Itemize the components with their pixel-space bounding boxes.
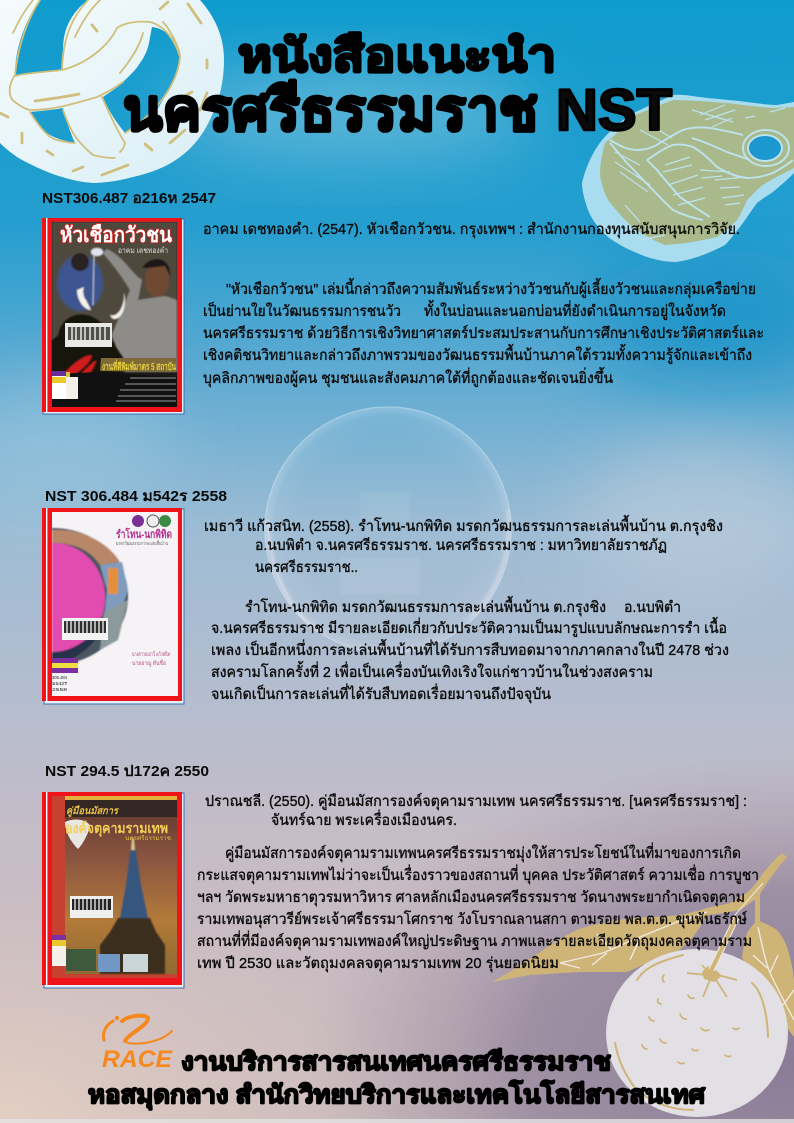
book cover 3: นครศรีธรรมราช [125,834,171,842]
icon: soap bubble [264,406,512,654]
abstract 3: คู่มือนมัสการองค์จตุคามรามเทพนครศรีธรรมราชมุ่งให้สารประโยชน์ในที่มาของการเกิด [225,842,741,863]
citation 3: ปราณชลี. (2550). คู่มือนมัสการองค์จตุคามรามเทพ นครศรีธรรมราช. [นครศรีธรรมราช] : [205,793,747,811]
icon: leaves and citrus fruit [492,853,794,1117]
icon: meat slice [582,95,794,262]
footer [88,1016,706,1111]
citation 2 [204,515,723,576]
icon: pretzel [0,0,224,183]
abstract 3 [197,842,759,973]
book cover 1: อาคม เดชทองคำ [118,246,168,255]
book cover 3 [42,792,184,988]
abstract 3: เทพ ปี 2530 และวัตถุมงคลจตุคามรามเทพ 20 รุ่นยอดนิยม [197,955,559,973]
abstract 2: เพลง เป็นอีกหนึ่งการละเล่นพื้นบ้านที่ได้รับการสืบทอดมาจากภาคกลางในปี 2478 ช่วง [211,639,729,659]
book cover 3: องค์จตุคามรามเทพ [65,820,168,837]
call number 3: NST 294.5 ป172ค 2550 [45,763,209,780]
abstract 1 [203,278,764,388]
abstract 2: อ.นบพิตำ [624,599,681,616]
book cover 1: งานที่ตีพิมพ์มาตร 5 สถาบัน [102,359,176,373]
title line 2: NST [556,78,672,143]
citation 3 [205,793,747,829]
icon: fruit stem [687,883,763,997]
citation 1: อาคม เดชทองคำ. (2547). หัวเชือกวัวชน. กรุงเทพฯ : สำนักงานกองทุนสนับสนุนการวิจัย. [203,221,740,239]
abstract 2: รำโทน-นกพิทิด มรดกวัฒนธรรมการละเล่นพื้นบ้าน ต.กรุงชิง [245,596,606,617]
abstract 1: นครศรีธรรมราช ด้วยวิธีการเชิงวิทยาศาสตร์ประสมประสานกับการศึกษาเชิงประวัติศาสตร์และ [203,325,764,342]
title line 2: นครศรีธรรมราช [123,78,538,143]
abstract 3: สถานที่ที่มีองค์จตุคามรามเทพองค์ใหญ่ประดิษฐาน ภาพและรายละเอียดวัตถุมงคลจตุคามราม [197,930,752,951]
abstract 3: ฯลฯ วัดพระมหาธาตุวรมหาวิหาร ศาลหลักเมืองนครศรีธรรมราช วัดนางพระยากำเนิดจตุคาม [197,889,745,907]
panel: book 2 [42,488,729,704]
book cover 2: 306.484 [52,675,67,680]
title line 1: หนังสือแนะนำ [238,30,556,81]
citation 2: เมธาวี แก้วสนิท. (2558). รำโทน-นกพิทิด มรดกวัฒนธรรมการละเล่นพื้นบ้าน ต.กรุงชิง [204,515,723,536]
abstract 3: รามเทพอนุสาวรีย์พระเจ้าศรีธรรมาโศกราช วังโบราณลานสกา ตามรอย พล.ต.ต. ขุนพันธรักษ์ [197,910,747,929]
abstract 2: จนเกิดเป็นการละเล่นที่ได้รับสืบทอดเรื่อยมาจนถึงปัจจุบัน [211,683,551,704]
abstract 2 [211,596,729,704]
abstract 1: บุคลิกภาพของผู้คน ชุมชนและสังคมภาคใต้ที่ถูกต้องและชัดเจนยิ่งขึ้น [203,367,613,388]
cover title 3: คู่มือนมัสการ [66,805,120,817]
book cover 2: นายอาญู หันชื่อ [132,659,166,667]
abstract 2: จ.นครศรีธรรมราช มีรายละเอียดเกี่ยวกับประวัติความเป็นมารูปแบบลักษณะการรำ เนื้อ [211,617,727,637]
book cover 2: นางสาวเมธาวี แก้วสนิท [132,650,170,658]
panel: book 1 [42,190,764,414]
panel: book 3 [42,763,759,988]
abstract 1: ทั้งในบ่อนและนอกบ่อนที่ยังดำเนินการอยู่ในจังหวัด [424,300,726,320]
citation 3: จันทร์ฉาย พระเครื่องเมืองนคร. [271,809,457,829]
abstract 1: เป็นย่านใยในวัฒนธรรมการชนวัว [203,301,401,320]
cover title 1: หัวเชือกวัวชน [60,223,173,247]
abstract 2: สงครามโลกครั้งที่ 2 เพื่อเป็นเครื่องบันเทิงเริงใจแก่ชาวบ้านในช่วงสงคราม [211,661,653,681]
footer line 2: หอสมุดกลาง สำนักวิทยบริการและเทคโนโลยีสารสนเทศ [88,1079,706,1111]
book cover 2 [42,508,184,704]
book cover 1 [42,218,184,414]
book cover 2: ม542ร [52,681,68,686]
logo: RACE: RACE [102,1046,173,1073]
cover title 2: รำโทน-นกพิทิด [116,527,172,541]
title [123,30,672,143]
logo: RACE [102,1016,173,1073]
citation 2: อ.นบพิตำ จ.นครศรีธรรมราช. นครศรีธรรมราช : มหาวิทยาลัยราชภัฏ [255,537,667,554]
citation 2: นครศรีธรรมราช.. [255,559,358,576]
abstract 1: "หัวเชือกวัวชน" เล่มนี้กล่าวถึงความสัมพันธ์ระหว่างวัวชนกับผู้เลี้ยงวัวชนและกลุ่มเครือข่าย [226,278,756,299]
icon: citrus fruit [606,949,788,1117]
abstract 1: เชิงคติชนวิทยาและกล่าวถึงภาพรวมของวัฒนธรรมพื้นบ้านภาคใต้รวมทั้งความรู้จักและเข้าถึง [203,344,752,364]
call number 2: NST 306.484 ม542ร 2558 [45,488,227,505]
call number 1: NST306.487 อ216ห 2547 [42,190,216,207]
footer line 1: งานบริการสารสนเทศนครศรีธรรมราช [181,1048,611,1076]
icon: gold leaves [492,853,794,1037]
book cover 2: มรดกวัฒนธรรมการละเล่นพื้นบ้าน [116,538,168,547]
abstract 3: กระแสจตุคามรามเทพไม่ว่าจะเป็นเรื่องราวของสถานที่ บุคคล ประวัติศาสตร์ ความเชื่อ การบูชา [197,864,759,885]
book cover 2: 2558 [52,687,68,692]
